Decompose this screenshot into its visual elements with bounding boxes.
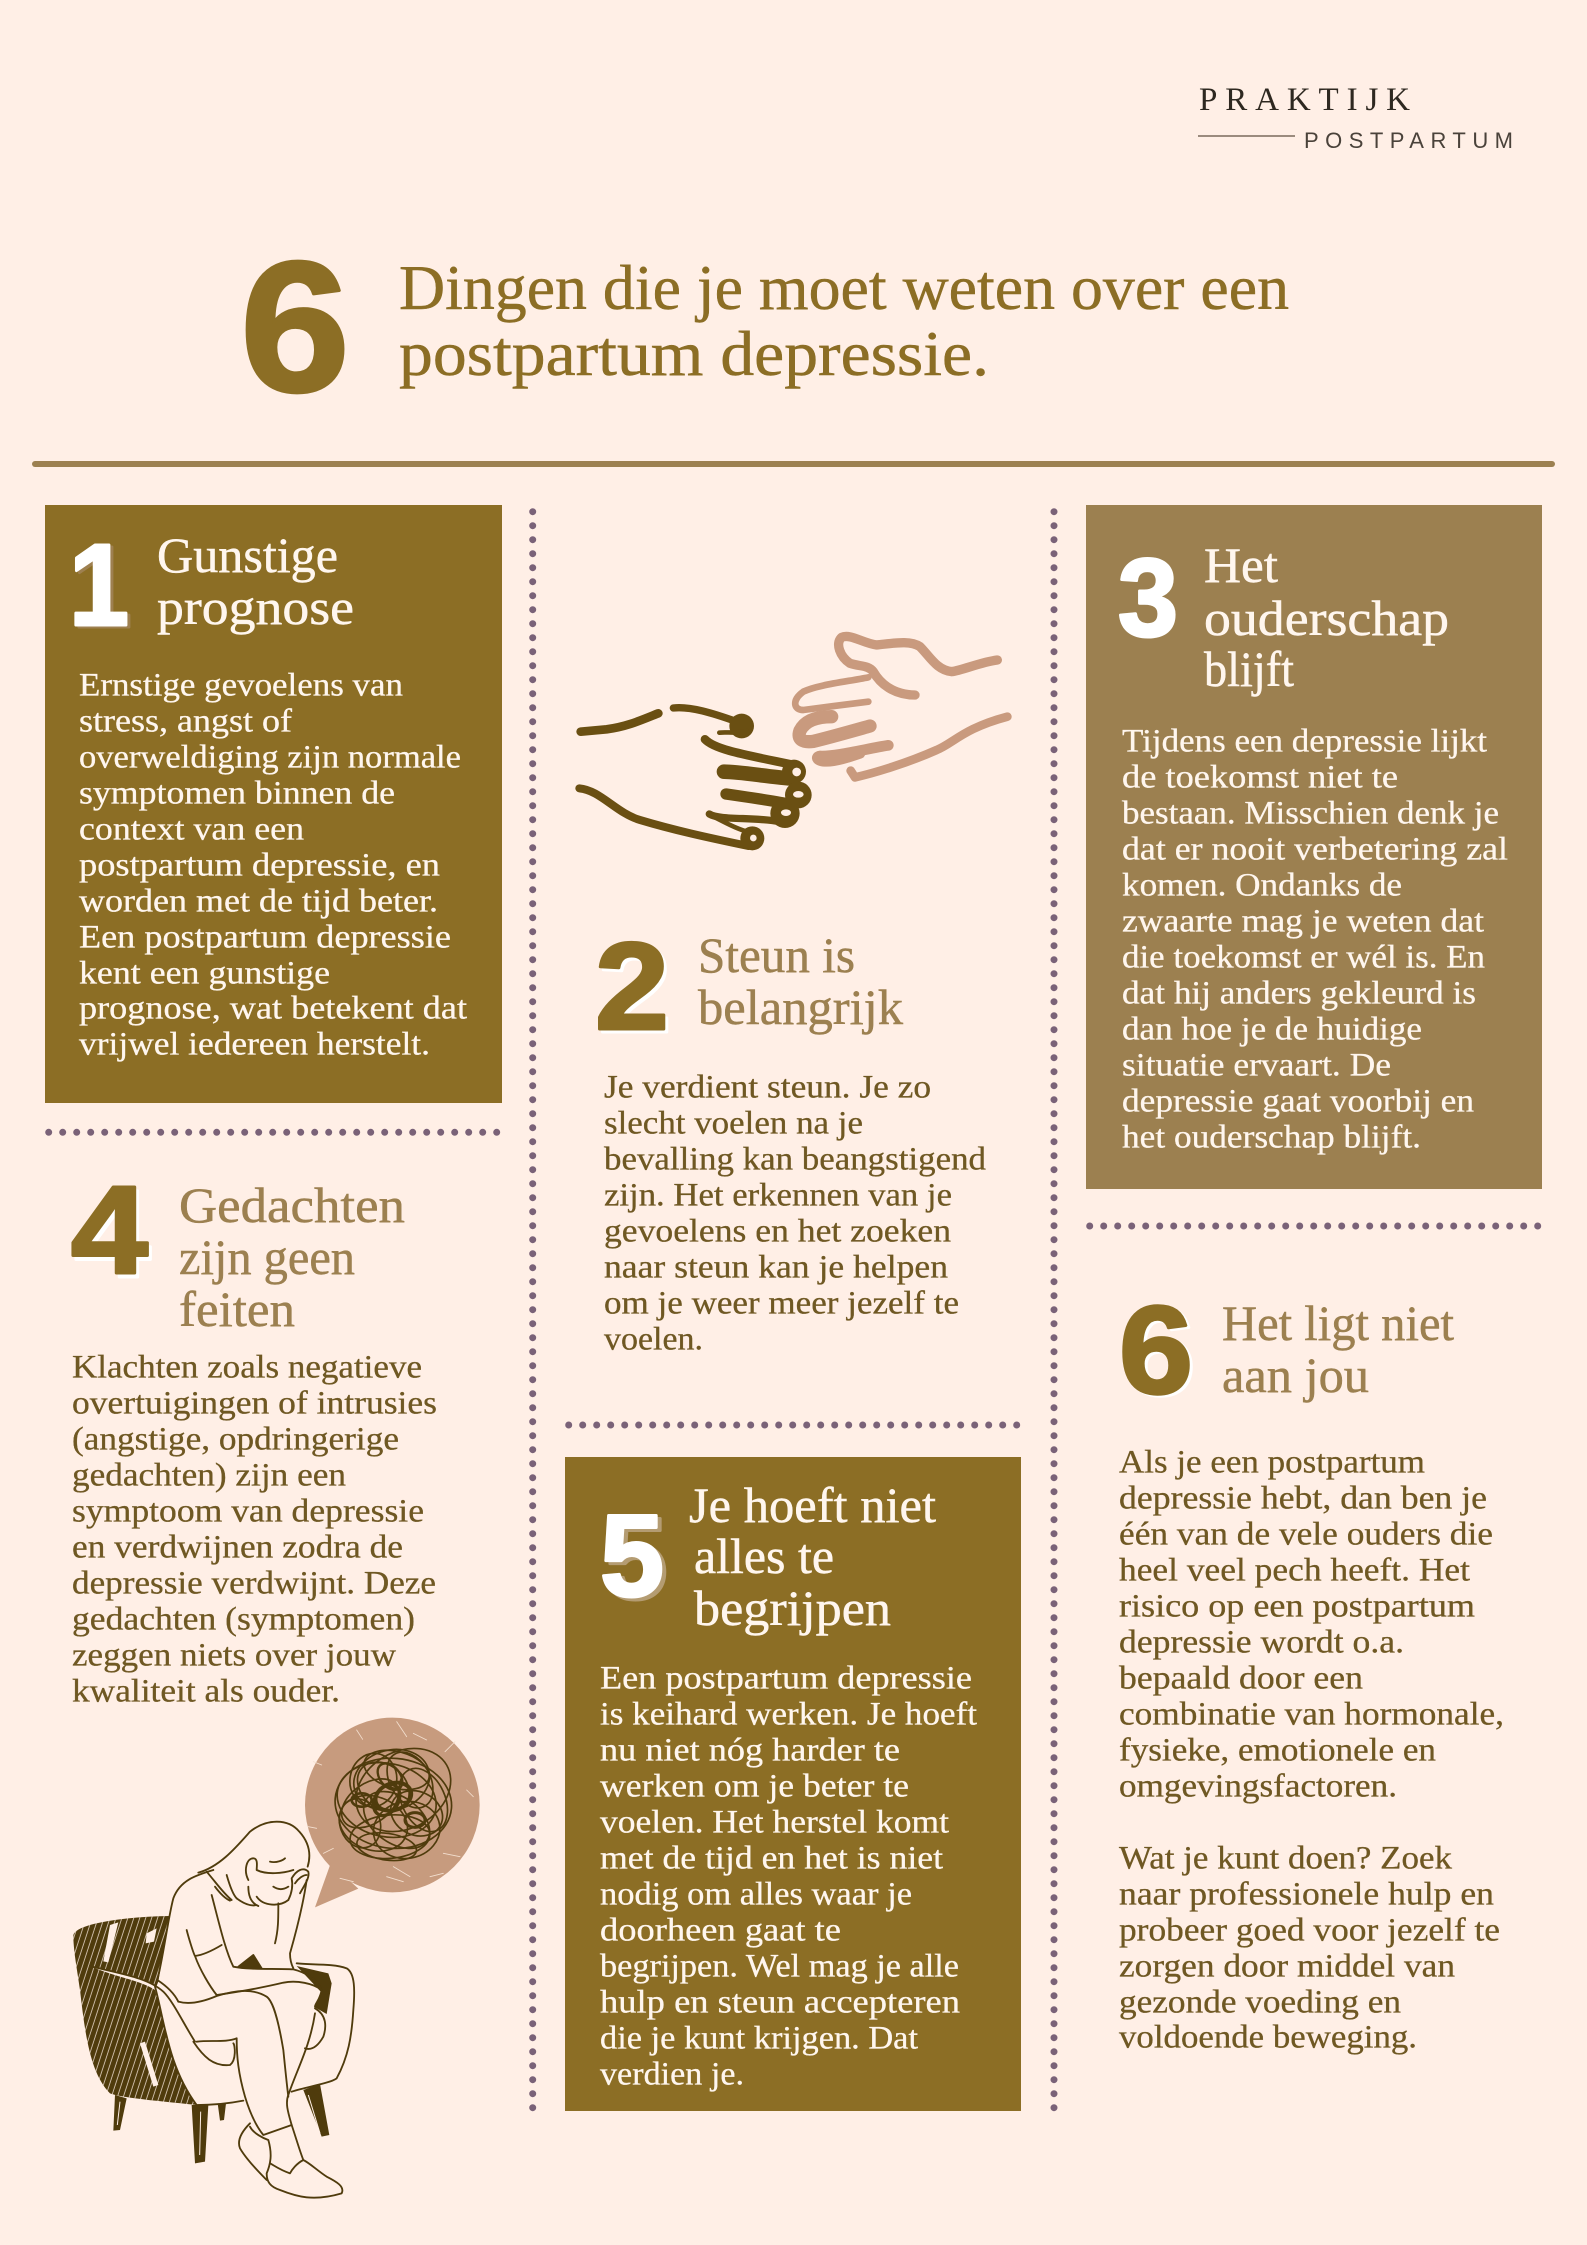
- panel 2: Steun is belangrijk: [595, 918, 987, 1358]
- pink hand: [795, 636, 1007, 777]
- body text: verdien je.: [600, 2057, 744, 2093]
- number 6: 6: [1119, 1281, 1193, 1420]
- body text: dan hoe je de huidige: [1122, 1012, 1422, 1048]
- body text: het ouderschap blijft.: [1122, 1120, 1421, 1156]
- body text: Als je een postpartum: [1119, 1445, 1425, 1481]
- body text: werken om je beter te: [600, 1769, 909, 1805]
- number 6: 6: [1122, 1283, 1196, 1422]
- logo: Praktijk Postpartum: [1198, 82, 1513, 153]
- body text: gezonde voeding en: [1119, 1985, 1401, 2021]
- body text: Ernstige gevoelens van: [79, 668, 403, 704]
- body text: overtuigingen of intrusies: [72, 1386, 437, 1422]
- body text: prognose, wat betekent dat: [79, 991, 467, 1027]
- big number 6: 6: [240, 224, 350, 431]
- panel 5: Je hoeft niet alles te begrijpen: [565, 1457, 1021, 2111]
- heading: Gedachten: [179, 1177, 405, 1233]
- panel 6: Het ligt niet aan jou: [1119, 1281, 1504, 2056]
- body text: voelen.: [604, 1322, 703, 1358]
- heading: alles te: [694, 1528, 834, 1584]
- body text: heel veel pech heeft. Het: [1119, 1553, 1470, 1589]
- heading: belangrijk: [698, 979, 903, 1035]
- body text: [600, 1661, 977, 2093]
- body text: depressie wordt o.a.: [1119, 1625, 1404, 1661]
- body text: depressie gaat voorbij en: [1122, 1084, 1474, 1120]
- heading: [698, 927, 903, 1035]
- number 2: 2: [595, 918, 669, 1056]
- heading: Gunstige: [157, 527, 338, 583]
- body text: zeggen niets over jouw: [72, 1638, 396, 1674]
- body text: kent een gunstige: [79, 956, 330, 992]
- body text: [1122, 724, 1508, 1156]
- body text: bepaald door een: [1119, 1661, 1363, 1697]
- body text: Je verdient steun. Je zo: [604, 1070, 931, 1106]
- body text: [1119, 1445, 1504, 2056]
- body text: probeer goed voor jezelf te: [1119, 1913, 1500, 1949]
- body text: de toekomst niet te: [1122, 760, 1398, 796]
- heading: [689, 1477, 936, 1636]
- body text: overweldiging zijn normale: [79, 740, 461, 776]
- body text: die toekomst er wél is. En: [1122, 940, 1485, 976]
- body text: om je weer meer jezelf te: [604, 1286, 959, 1322]
- logo: Praktijk Postpartum: PRAKTIJK: [1199, 82, 1410, 118]
- body text: fysieke, emotionele en: [1119, 1733, 1436, 1769]
- icon: two reaching hands: [579, 636, 1007, 850]
- logo: Praktijk Postpartum: POSTPARTUM: [1304, 128, 1513, 153]
- number 3: 3: [1118, 537, 1178, 660]
- body text: Een postpartum depressie: [600, 1661, 972, 1697]
- panel 1: Gunstige prognose: [45, 505, 502, 1103]
- body text: slecht voelen na je: [604, 1106, 863, 1142]
- title: Dingen die je moet weten over een: [399, 252, 1289, 323]
- body text: Tijdens een depressie lijkt: [1122, 724, 1487, 760]
- body text: [79, 668, 467, 1063]
- body text: zorgen door middel van: [1119, 1949, 1455, 1985]
- heading: Je hoeft niet: [689, 1477, 936, 1533]
- body text: zwaarte mag je weten dat: [1122, 904, 1484, 940]
- number 1: 1: [69, 520, 129, 650]
- body text: één van de vele ouders die: [1119, 1517, 1493, 1553]
- body text: omgevingsfactoren.: [1119, 1769, 1397, 1805]
- body text: depressie verdwijnt. Deze: [72, 1566, 436, 1602]
- body text: komen. Ondanks de: [1122, 868, 1402, 904]
- body text: Een postpartum depressie: [79, 920, 451, 956]
- body text: zijn. Het erkennen van je: [604, 1178, 952, 1214]
- body text: [72, 1350, 437, 1710]
- body text: vrijwel iedereen herstelt.: [79, 1027, 430, 1063]
- heading: [1204, 537, 1449, 697]
- body text: die je kunt krijgen. Dat: [600, 2021, 918, 2057]
- illustration: person in chair with thought bubble: [73, 1718, 480, 2198]
- body text: voelen. Het herstel komt: [600, 1805, 949, 1841]
- number 4: 4: [74, 1165, 151, 1304]
- body text: worden met de tijd beter.: [79, 884, 438, 920]
- number 4: 4: [71, 1161, 148, 1300]
- heading: ouderschap: [1204, 590, 1449, 646]
- panel 3: Het ouderschap blijft: [1086, 505, 1542, 1189]
- body text: naar professionele hulp en: [1119, 1877, 1494, 1913]
- heading: zijn geen: [179, 1229, 355, 1285]
- number 5: 5: [600, 1490, 664, 1621]
- heading: [157, 527, 354, 635]
- body text: en verdwijnen zodra de: [72, 1530, 403, 1566]
- body text: gedachten) zijn een: [72, 1458, 346, 1494]
- body text: doorheen gaat te: [600, 1913, 841, 1949]
- body text: nu niet nóg harder te: [600, 1733, 900, 1769]
- body text: Wat je kunt doen? Zoek: [1119, 1841, 1453, 1877]
- body text: hulp en steun accepteren: [600, 1985, 960, 2021]
- heading: blijft: [1204, 641, 1294, 697]
- heading: Het ligt niet: [1222, 1295, 1454, 1351]
- body text: situatie ervaart. De: [1122, 1048, 1391, 1084]
- heading: [179, 1177, 405, 1337]
- body text: (angstige, opdringerige: [72, 1422, 399, 1458]
- number 2: 2: [598, 921, 672, 1059]
- number 1: 1: [72, 522, 132, 652]
- body text: naar steun kan je helpen: [604, 1250, 948, 1286]
- body text: symptomen binnen de: [79, 776, 395, 812]
- body text: stress, angst of: [79, 704, 292, 740]
- body text: nodig om alles waar je: [600, 1877, 912, 1913]
- body text: combinatie van hormonale,: [1119, 1697, 1504, 1733]
- number 5: 5: [604, 1493, 668, 1624]
- body text: depressie hebt, dan ben je: [1119, 1481, 1487, 1517]
- heading: prognose: [157, 579, 354, 635]
- heading: Het: [1204, 537, 1278, 593]
- armchair: [73, 1916, 354, 2163]
- body text: bestaan. Misschien denk je: [1122, 796, 1499, 832]
- body text: gedachten (symptomen): [72, 1602, 415, 1638]
- heading: Steun is: [698, 927, 855, 983]
- thought bubble with scribble: [305, 1718, 480, 1907]
- body text: dat hij anders gekleurd is: [1122, 976, 1476, 1012]
- body text: context van een: [79, 812, 304, 848]
- dark hand: [579, 708, 812, 850]
- body text: symptoom van depressie: [72, 1494, 424, 1530]
- body text: bevalling kan beangstigend: [604, 1142, 987, 1178]
- body text: dat er nooit verbetering zal: [1122, 832, 1508, 868]
- title: [399, 252, 1289, 389]
- body text: voldoende beweging.: [1119, 2020, 1417, 2056]
- heading: begrijpen: [694, 1580, 891, 1636]
- body text: kwaliteit als ouder.: [72, 1674, 340, 1710]
- body text: [604, 1070, 987, 1358]
- title: postpartum depressie.: [399, 318, 989, 389]
- heading: feiten: [179, 1281, 295, 1337]
- body text: met de tijd en het is niet: [600, 1841, 943, 1877]
- panel 4: Gedachten zijn geen feiten: [71, 1161, 437, 1710]
- body text: risico op een postpartum: [1119, 1589, 1475, 1625]
- heading: aan jou: [1222, 1347, 1369, 1403]
- seated person: [157, 1822, 342, 2198]
- body text: begrijpen. Wel mag je alle: [600, 1949, 959, 1985]
- body text: is keihard werken. Je hoeft: [600, 1697, 977, 1733]
- body text: gevoelens en het zoeken: [604, 1214, 951, 1250]
- body text: postpartum depressie, en: [79, 848, 440, 884]
- body text: Klachten zoals negatieve: [72, 1350, 422, 1386]
- heading: [1222, 1295, 1454, 1403]
